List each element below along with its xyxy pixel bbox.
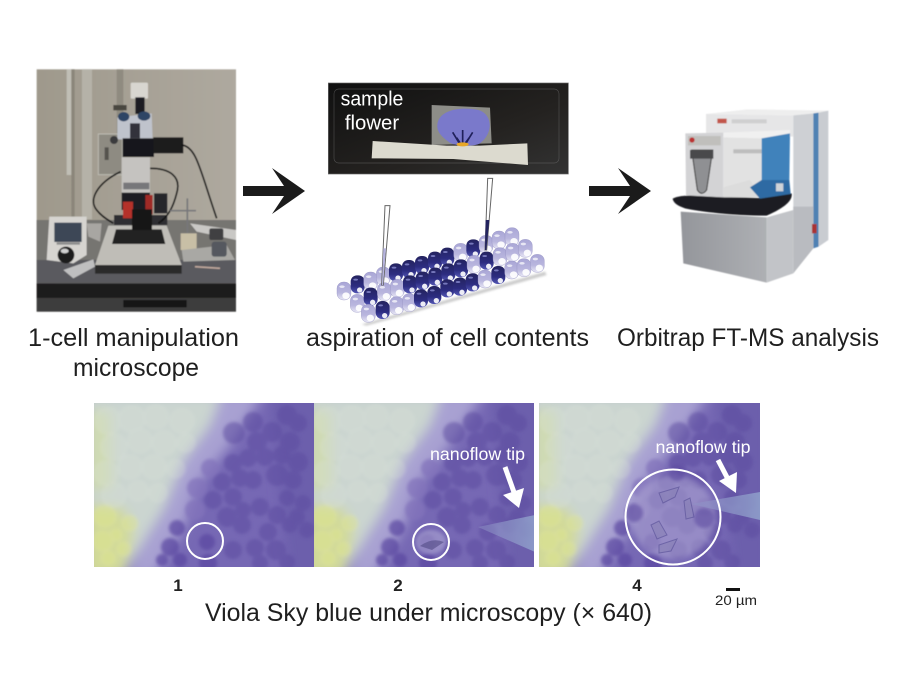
label: sample flower [341,88,403,135]
label: microscope: 1-cell manipulation [28,324,239,352]
bench clutter [63,223,236,278]
panel number 1: 1 [173,576,183,595]
photo: 1-cell manipulation microscope [37,69,236,312]
table top [37,220,236,312]
target circle [413,524,449,560]
photo: sample flower slide [328,83,568,174]
cell rows [337,228,544,322]
arrow: nanoflow tip (panel 4) [718,460,737,493]
panel: micrograph 1 [94,403,314,567]
caption: Viola Sky blue under microscopy (× 640) [205,599,652,627]
petal [437,109,490,146]
panel: micrograph 2 [314,403,534,567]
label: sample flower: flower [345,112,399,135]
arrow: nanoflow tip (panel 2) [503,467,524,508]
label: aspiration: aspiration of cell contents [306,324,589,352]
pipette: left [382,206,390,285]
arrow: aspiration to Orbitrap [589,168,651,214]
front module [685,130,791,199]
damaged cells [651,487,694,553]
pipette: right [485,178,493,250]
panel number 2: 2 [393,576,403,595]
label: nanoflow tip (panel 2): nanoflow tip [430,444,525,464]
target circle [187,523,223,559]
lower cabinet [681,207,817,283]
white panel divider [534,403,539,568]
label: sample flower: sample [341,88,403,111]
label: microscope: microscope [73,354,199,382]
target circle [626,470,720,564]
microscope stage [95,215,182,274]
rear unit [706,109,828,257]
label: microscope [28,324,239,382]
scale bar [715,588,757,608]
label: nanoflow tip (panel 4): nanoflow tip [656,437,750,457]
panel: micrograph 4 [539,403,760,567]
controller [47,217,87,263]
label: Orbitrap: Orbitrap FT-MS analysis [617,324,879,352]
diagram: epidermal cell array with pipettes [337,178,547,326]
cell shadow [362,272,547,326]
arrow: microscope to aspiration [243,168,305,214]
scale bar: 20 µm [715,593,757,608]
black shelf [673,193,792,216]
microscope body [94,83,217,233]
gauze strip [372,141,528,165]
photo: Orbitrap FT-MS instrument [673,109,828,283]
panel number 4: 4 [632,576,642,595]
nanoflow tip [698,492,760,520]
